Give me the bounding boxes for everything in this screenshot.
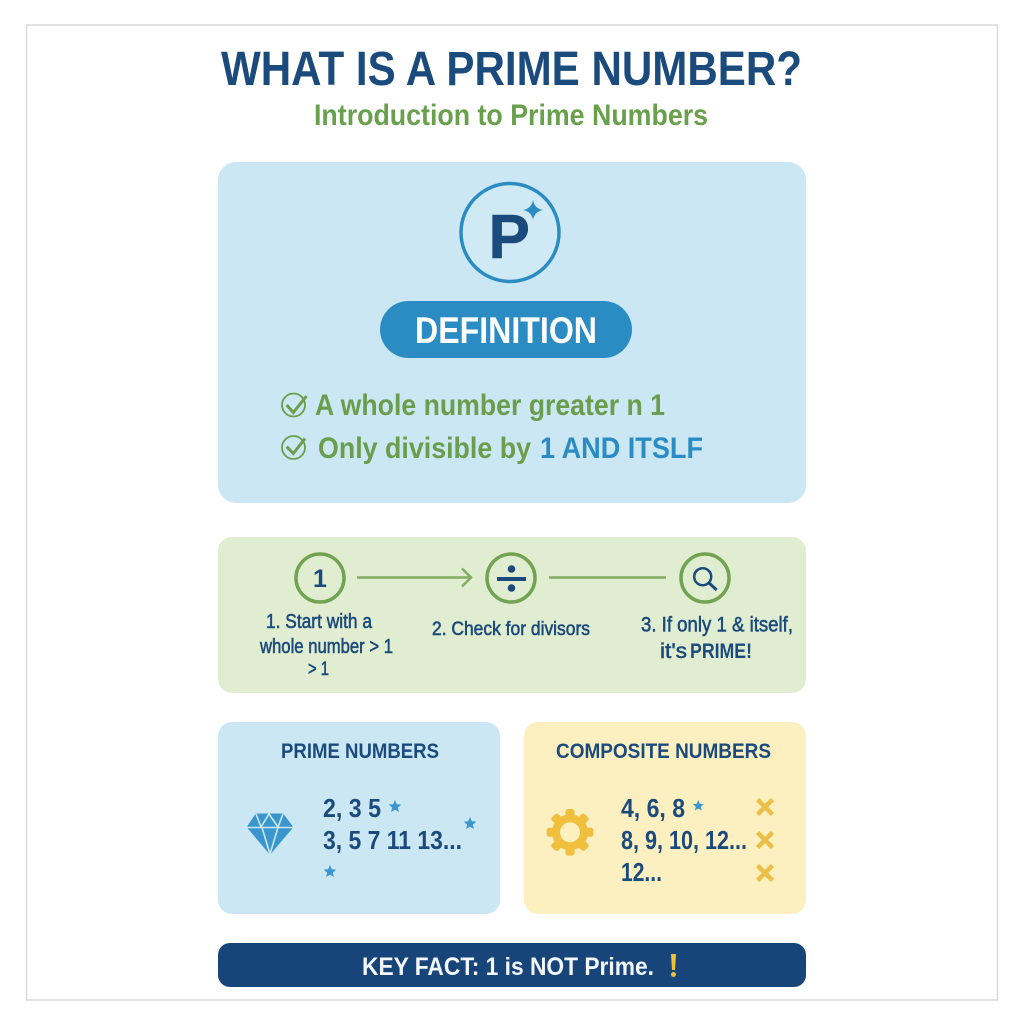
panel: prime numbers	[218, 722, 500, 914]
icons: cross marks	[758, 800, 772, 880]
step three text: PRIME!	[690, 640, 752, 663]
panel: steps	[218, 537, 806, 693]
icon: exclamation mark	[671, 954, 676, 977]
stars	[324, 800, 476, 877]
key fact banner	[218, 943, 806, 987]
title: WHAT IS A PRIME NUMBER?	[221, 43, 802, 96]
icon: diamond	[248, 814, 292, 854]
prime list	[323, 793, 462, 855]
arrow: step one to two	[357, 568, 471, 586]
definition badge	[380, 301, 632, 358]
definition badge: DEFINITION	[415, 310, 597, 351]
step one text: 1. Start with a	[266, 611, 373, 633]
connector: step two to three	[549, 576, 666, 579]
step three text: 3. If only 1 & itself,	[641, 614, 793, 636]
step three text	[641, 614, 793, 663]
prime list: 3, 5 7 11 13...	[323, 825, 462, 855]
icon: P in a circle with sparkle: P	[488, 203, 530, 272]
step two text: 2. Check for divisors	[432, 619, 590, 640]
icon: small star	[693, 800, 704, 810]
heading: prime numbers: PRIME NUMBERS	[281, 740, 439, 763]
step three text: it's	[660, 640, 687, 663]
composite list: 12...	[621, 857, 662, 887]
icon: P in a circle with sparkle	[461, 184, 559, 282]
icon: check one	[282, 394, 306, 416]
panel: definition	[218, 162, 806, 503]
definition line two: Only divisible by	[318, 432, 531, 465]
composite list	[621, 793, 747, 887]
icon: step one circle: 1	[313, 565, 327, 593]
composite list: 8, 9, 10, 12...	[621, 825, 747, 855]
prime list: 2, 3 5	[323, 793, 381, 823]
definition line one: A whole number greater n 1	[315, 389, 665, 422]
definition highlight: 1 AND ITSLF	[540, 432, 703, 465]
icon: step one circle	[296, 554, 344, 602]
step one text: whole number > 1	[259, 636, 393, 658]
icon: gear	[547, 809, 593, 856]
step one text: > 1	[308, 659, 329, 680]
key fact banner: KEY FACT: 1 is NOT Prime.	[362, 953, 654, 981]
icon: magnifier	[681, 554, 729, 602]
icon: divide	[487, 554, 535, 602]
step one text	[259, 611, 393, 680]
heading: composite numbers: COMPOSITE NUMBERS	[556, 740, 771, 763]
composite list: 4, 6, 8	[621, 793, 685, 823]
icon: check two	[282, 436, 305, 459]
subtitle: Introduction to Prime Numbers	[314, 99, 708, 132]
panel: composite numbers	[524, 722, 806, 914]
